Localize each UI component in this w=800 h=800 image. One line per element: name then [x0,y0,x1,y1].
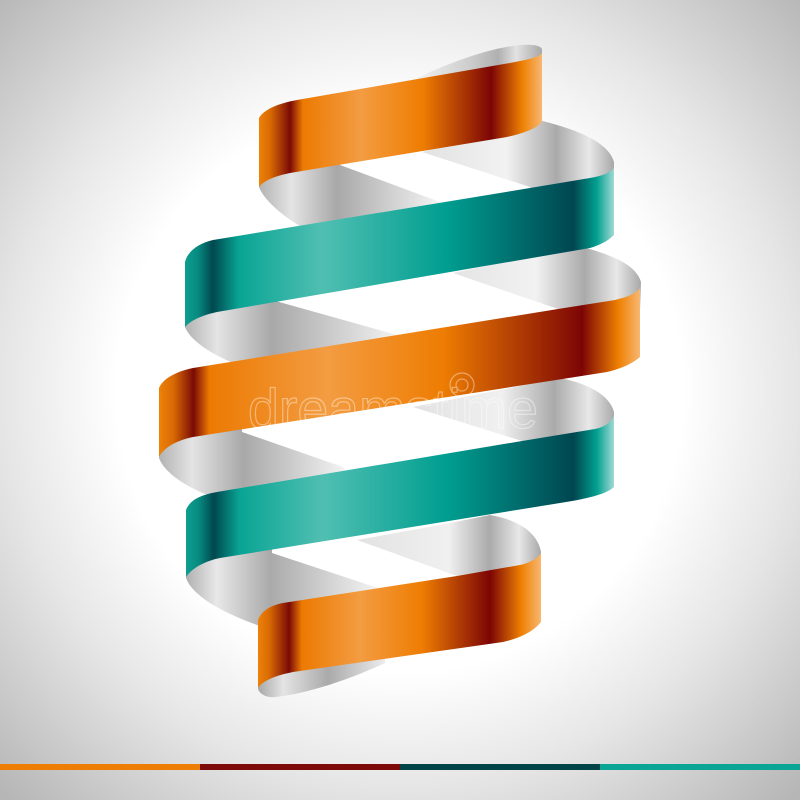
ribbon back: silver fold right 2 [453,245,641,320]
teal band 4 [186,416,614,577]
ribbon back: silver fold left 3 [159,425,350,497]
color legend bar [0,764,800,770]
ribbon back: silver fold left 1 [259,158,445,229]
ribbon back: silver fold right 3 [413,378,614,450]
spiral ribbon [159,45,641,697]
ribbon back: silver fold left 4 [186,545,385,626]
ribbon back: top silver tail [413,45,542,88]
orange band 5 [258,553,541,688]
orange band 1 [259,53,542,187]
teal band 2 [185,168,614,327]
ribbon back: silver fold right 1 [422,118,614,200]
watermark: dreamstime [248,377,538,440]
ribbon back: silver fold left 2 [185,293,400,366]
ribbon back: silver fold right 4 [357,515,541,585]
orange band 3 [159,288,640,457]
ribbon back: bottom silver tail [258,650,385,697]
